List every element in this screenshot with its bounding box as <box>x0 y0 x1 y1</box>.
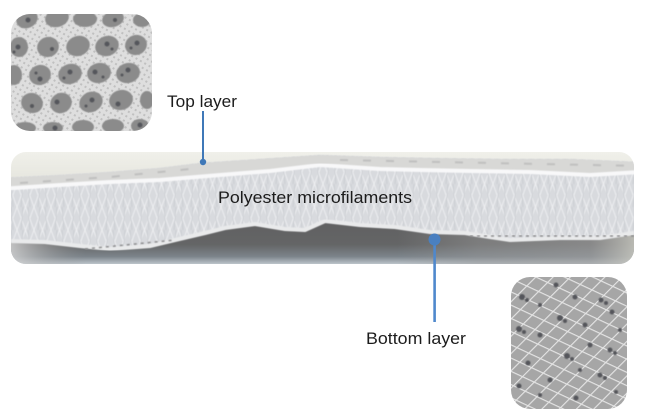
white bottom mesh edge <box>11 221 634 249</box>
mesh holes, top layer <box>11 14 152 131</box>
leader line: top layer <box>200 111 206 165</box>
label: top layer: Top layer <box>167 92 237 111</box>
knit texture on lower edge <box>85 236 634 249</box>
label: polyester microfilaments: Polyester microfilaments <box>218 188 412 207</box>
white top edge of filaments <box>0 165 640 189</box>
photo: mat cross-section <box>0 152 640 264</box>
grey top mesh band <box>11 155 634 186</box>
dark speckles in holes <box>12 18 142 130</box>
photo: top layer mesh swatch <box>11 14 152 131</box>
backdrop above the mat <box>11 152 633 178</box>
leader line: bottom layer <box>428 234 440 322</box>
dark speckles in mesh cells <box>516 282 622 400</box>
photo: bottom layer mesh swatch <box>511 277 627 409</box>
label: bottom layer: Bottom layer <box>366 329 466 348</box>
filament body <box>11 167 634 251</box>
dark knit marks along the top band <box>20 160 640 183</box>
shadow under the mat <box>11 222 634 264</box>
